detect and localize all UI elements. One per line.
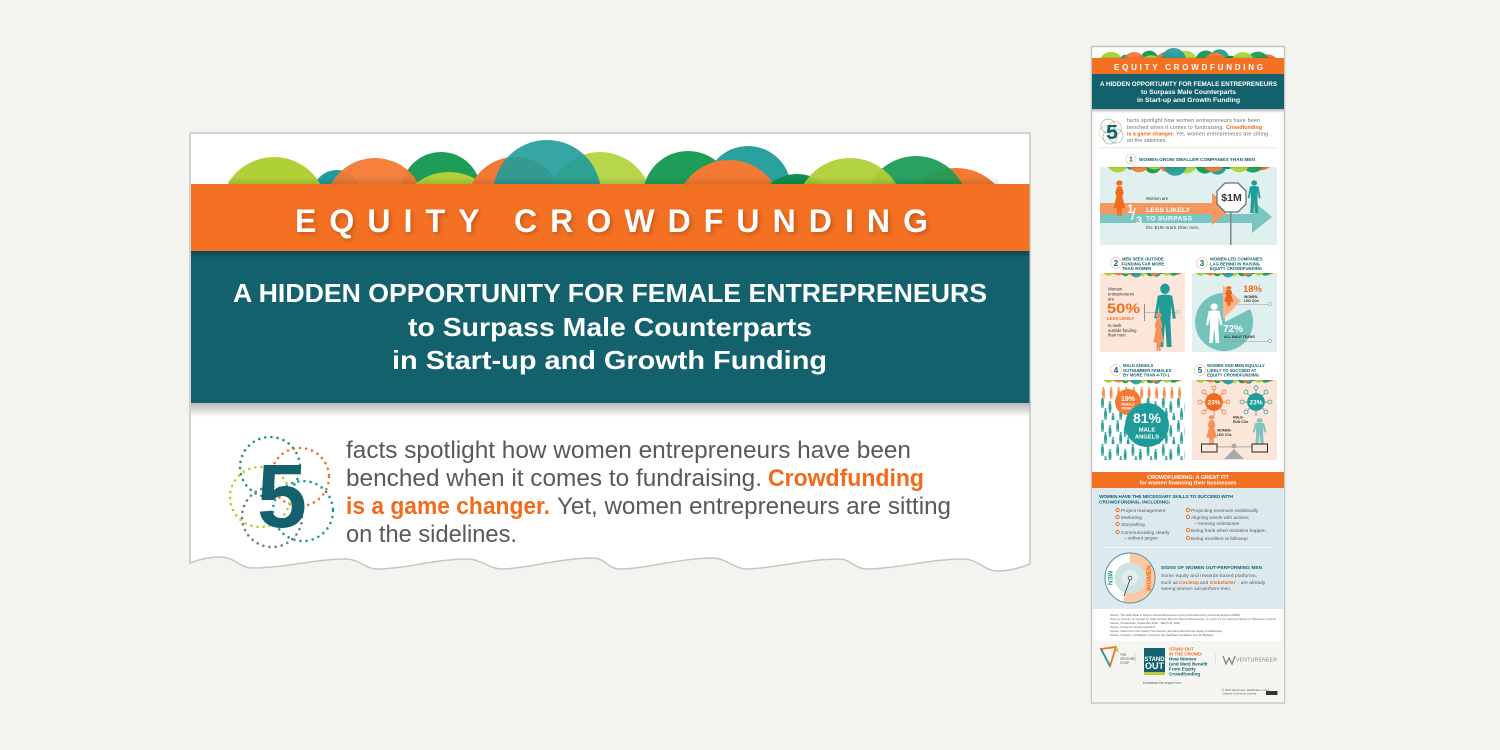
banner: great fit: for women financing their businesses — [1140, 480, 1236, 486]
icon: dotted circles with number five — [230, 437, 333, 547]
logo: ventureneer: VENTURENEER — [1236, 658, 1277, 664]
intro text: is a game changer. — [346, 493, 550, 520]
skills heading: WOMEN HAVE THE NECESSARY SKILLS TO SUCCEED WITH — [1099, 494, 1234, 500]
report title: (and Men) Benefit — [1169, 662, 1208, 666]
heading band: in Start-up and Growth Funding — [1137, 97, 1240, 104]
intro text: Yet, women entrepreneurs are sitting — [557, 493, 951, 520]
intro text small: facts spotlight how women entrepreneurs have been — [1127, 118, 1260, 124]
skills list right: Projecting revenues realistically — [1191, 508, 1259, 514]
fact 5 heading — [1194, 363, 1265, 378]
skills list left: Storytelling — [1121, 522, 1145, 528]
skills list right: Aligning words with actions — [1191, 515, 1249, 521]
logo: venture coop: COOP — [1120, 661, 1129, 665]
icon: small five — [1099, 119, 1123, 144]
figure: woman — [1114, 180, 1125, 216]
fact 4 heading — [1110, 363, 1172, 378]
fact 3 heading: WOMEN-LED COMPANIES — [1210, 256, 1263, 262]
intro text: Crowdfunding — [768, 465, 924, 492]
intro text small: is a game changer. — [1127, 132, 1175, 138]
fact 4 heading: 4 — [1114, 366, 1119, 375]
intro text: on the sidelines. — [346, 521, 517, 548]
panel: full infographic thumbnail — [1092, 46, 1284, 703]
stat: one third less likely: TO SURPASS — [1146, 216, 1192, 222]
icon: teal network: 23% — [1249, 400, 1263, 406]
footnotes: Source: The 2016 State of Women-Owned Businesses report (commissioned by American Express OPEN) — [1110, 613, 1240, 617]
stat: male angels: ANGELS — [1135, 434, 1159, 440]
signs text — [1161, 565, 1266, 592]
labels: RUN COs — [1233, 420, 1248, 424]
stat: one third less likely: the $1M mark than men. — [1146, 225, 1200, 230]
stat: fifty percent: entrepreneurs — [1108, 292, 1134, 296]
report cover: OUT — [1145, 661, 1164, 671]
labels: LED COs — [1217, 433, 1232, 437]
labels: MALE- — [1233, 416, 1244, 420]
chart: gauge: MEN — [1106, 571, 1113, 586]
fact 3 heading: EQUITY CROWDFUNDING — [1210, 266, 1262, 271]
report cover — [1144, 648, 1165, 675]
report cover: STAND — [1144, 657, 1165, 663]
stat: fifty percent: LESS LIKELY — [1107, 316, 1134, 321]
report title: From Equity — [1169, 666, 1196, 672]
pie chart: ALL MALE TEAMS — [1224, 335, 1256, 339]
stat: female angels — [1115, 389, 1141, 415]
skills list left: – without jargon — [1124, 536, 1158, 542]
fact 3 heading: 3 — [1200, 259, 1205, 268]
figure: man on scale — [1253, 418, 1266, 444]
decorative hills small — [1099, 48, 1280, 80]
skills list left: Communicating clearly — [1121, 530, 1170, 536]
icon: balance scale — [1202, 444, 1268, 459]
icon: dotted circles with number five: 5 — [257, 447, 307, 547]
panel: fact 2 — [1100, 256, 1185, 352]
stat: male angels: 81% — [1133, 410, 1162, 426]
orange arrow — [1100, 193, 1231, 225]
labels: WOMEN- — [1217, 428, 1232, 432]
intro text small: benched when it comes to fundraising. — [1127, 125, 1224, 131]
copyright — [1222, 688, 1278, 696]
heading band: A HIDDEN OPPORTUNITY FOR FEMALE ENTREPRENEURS — [1100, 81, 1278, 88]
intro text: facts spotlight how women entrepreneurs have been — [346, 437, 911, 464]
signs text: CircleUp — [1179, 580, 1199, 586]
stat: female angels: 19% — [1121, 396, 1136, 403]
banner: great fit — [1092, 472, 1284, 488]
icon: orange network: 23% — [1207, 400, 1221, 406]
fact 3 heading: LAG BEHIND IN RAISING — [1210, 262, 1260, 266]
pie chart: 18% — [1243, 284, 1262, 294]
download link: Download the report here. — [1143, 681, 1182, 685]
logo: venture coop: VENTURE — [1120, 657, 1135, 661]
copyright: © 2015 Venturneer. Distribution under — [1222, 688, 1269, 692]
pie chart — [1195, 284, 1272, 351]
skills heading: CROWDFUNDING, INCLUDING: — [1099, 500, 1171, 506]
stat: fifty percent: 50% — [1107, 300, 1141, 316]
signs text: Kickstarter — [1210, 580, 1236, 586]
panel: fact 4 — [1100, 363, 1185, 460]
crowd of angels — [1100, 386, 1185, 460]
fact 4 heading: BY MORE THAN 4-TO-1 — [1123, 372, 1170, 378]
panel: fact 3 — [1192, 256, 1277, 352]
report title — [1169, 646, 1208, 676]
panel: skills and signs — [1092, 488, 1284, 609]
stat: fifty percent — [1107, 286, 1141, 338]
panel: enlarged detail card — [190, 133, 1030, 571]
heading lines — [233, 278, 987, 375]
decorative hills — [221, 140, 1011, 280]
stat: one third less likely: 1 — [1127, 202, 1134, 216]
banner: great fit: CROWDFUNDING: A GREAT FIT — [1147, 475, 1230, 481]
footnotes — [1110, 613, 1276, 637]
stat: fifty percent: Women — [1108, 286, 1123, 292]
intro text: benched when it comes to fundraising. — [346, 465, 762, 492]
stat: fifty percent: to seek — [1108, 323, 1122, 328]
logo: venture coop — [1101, 647, 1135, 666]
title: EQUITY CROWDFUNDING — [295, 203, 928, 239]
sign: one million dollars — [1217, 183, 1246, 245]
fact 1 heading: WOMEN GROW SMALLER COMPANIES THAN MEN — [1139, 157, 1256, 162]
stat: male angels — [1125, 403, 1169, 447]
stat: fifty percent: outside funding — [1108, 328, 1137, 333]
header band — [1092, 58, 1284, 74]
stat: one third less likely: / — [1131, 205, 1136, 224]
labels — [1217, 416, 1248, 437]
report title: IN THE CROWD: — [1169, 652, 1203, 656]
heading lines: in Start-up and Growth Funding — [392, 345, 827, 375]
fact 2 heading: THAN WOMEN — [1122, 266, 1151, 271]
footer — [1092, 641, 1284, 702]
panel: fact 5 — [1192, 363, 1277, 460]
stat: fifty percent: are — [1108, 296, 1115, 302]
stat: female angels: FEMALE — [1121, 402, 1135, 406]
fact 5 heading: 5 — [1198, 366, 1203, 375]
report title: How Women — [1169, 656, 1197, 662]
figure: man — [1248, 180, 1261, 213]
heading band — [1092, 74, 1284, 113]
header band: EQUITY CROWDFUNDING — [1114, 63, 1263, 72]
stat: one third less likely: Women are — [1146, 196, 1169, 201]
report title: STAND OUT — [1169, 646, 1194, 652]
signs text: SIGNS OF WOMEN OUT-PERFORMING MEN — [1161, 565, 1263, 570]
report title: Crowdfunding — [1169, 672, 1200, 676]
chart: gauge: WOMEN — [1146, 565, 1153, 591]
stat: female angels: ANGELS — [1121, 406, 1135, 410]
logo: venture coop: THE — [1120, 653, 1126, 657]
sign: one million dollars: $1M — [1221, 192, 1242, 204]
intro text small: on the sidelines. — [1127, 138, 1167, 144]
orange title band — [191, 184, 1030, 252]
fact 5 heading: LIKELY TO SUCCEED AT — [1207, 368, 1257, 373]
skills list right: – meeting milestones — [1194, 521, 1240, 527]
fact 2 heading: FUNDING FAR MORE — [1122, 262, 1165, 266]
pie chart: WOMEN- — [1244, 295, 1259, 299]
skills heading — [1099, 494, 1234, 506]
signs text: seeing women out-perform men. — [1161, 586, 1231, 592]
signs text: and — [1200, 580, 1208, 586]
fact 3 heading — [1196, 256, 1263, 271]
footnotes: Source: Crowdfunder, September 2015 – March 31, 2016 — [1110, 621, 1180, 625]
stat: fifty percent: than men. — [1108, 332, 1127, 338]
stat: one third less likely — [1127, 196, 1200, 230]
intro text small — [1127, 118, 1268, 144]
skills list left: Project management — [1121, 508, 1166, 514]
signs text: such as — [1161, 580, 1178, 586]
skills list right — [1186, 508, 1266, 542]
fact 4 heading: OUTNUMBER FEMALES — [1123, 368, 1172, 373]
heading lines: A HIDDEN OPPORTUNITY FOR FEMALE ENTREPRENEURS — [233, 278, 987, 308]
pie chart: 72% — [1223, 324, 1243, 335]
fact 2 heading: MEN SEEK OUTSIDE — [1122, 256, 1164, 262]
footnotes: Source: Stand Out in the Crowd: How Women (and Men) Benefit From Equity Crowdfunding — [1110, 629, 1222, 633]
intro text small: Crowdfunding — [1226, 125, 1262, 131]
stat: one third less likely: 3 — [1136, 215, 1142, 227]
stat: one third less likely: LESS LIKELY — [1146, 207, 1190, 214]
pie chart: LED COs — [1244, 299, 1259, 303]
skills list left — [1116, 508, 1170, 542]
copyright: Creative Commons License — [1222, 692, 1257, 696]
fact 1 heading: 1 — [1129, 156, 1133, 164]
panel: fact 1 — [1100, 148, 1277, 245]
teal arrow — [1100, 200, 1272, 233]
footnotes: Source: Center for Venture Research — [1110, 625, 1156, 629]
figure: man and woman — [1144, 284, 1180, 351]
fact 5 heading: EQUITY CROWDFUNDING — [1207, 372, 1259, 378]
signs text: Some equity and rewards-based platforms, — [1161, 573, 1257, 579]
chart: gauge — [1105, 553, 1155, 603]
stat: male angels: MALE — [1139, 428, 1155, 434]
fact 2 heading: 2 — [1114, 259, 1119, 268]
heading band: to Surpass Male Counterparts — [1141, 89, 1236, 96]
figure: woman on scale — [1206, 415, 1217, 444]
signs text: , are already — [1238, 580, 1266, 586]
icon: small five: 5 — [1106, 122, 1118, 144]
fact 1 heading — [1126, 154, 1256, 164]
fact 5 heading: WOMEN AND MEN EQUALLY — [1207, 363, 1265, 368]
footnotes: Source: Access to Capital by High-Growth Women-Owned Businesses: A report by the National Women's Business Council — [1110, 617, 1276, 621]
heading lines: to Surpass Male Counterparts — [408, 312, 812, 342]
teal heading band — [191, 251, 1030, 417]
skills list left: Marketing — [1121, 515, 1142, 521]
skills list right: Being frank when mistakes happen — [1191, 528, 1266, 534]
fact 2 heading — [1110, 256, 1165, 271]
intro text — [346, 437, 951, 548]
logo: ventureneer — [1223, 656, 1277, 664]
skills list right: Being excellent at followup — [1191, 536, 1248, 542]
intro text small: Yet, women entrepreneurs are sitting — [1176, 132, 1268, 138]
fact 4 heading: MALE ANGELS — [1123, 363, 1154, 368]
footnotes: Source: CircleUp, and Babson University, the Kauffman Foundation and UC Berkeley — [1110, 633, 1214, 637]
